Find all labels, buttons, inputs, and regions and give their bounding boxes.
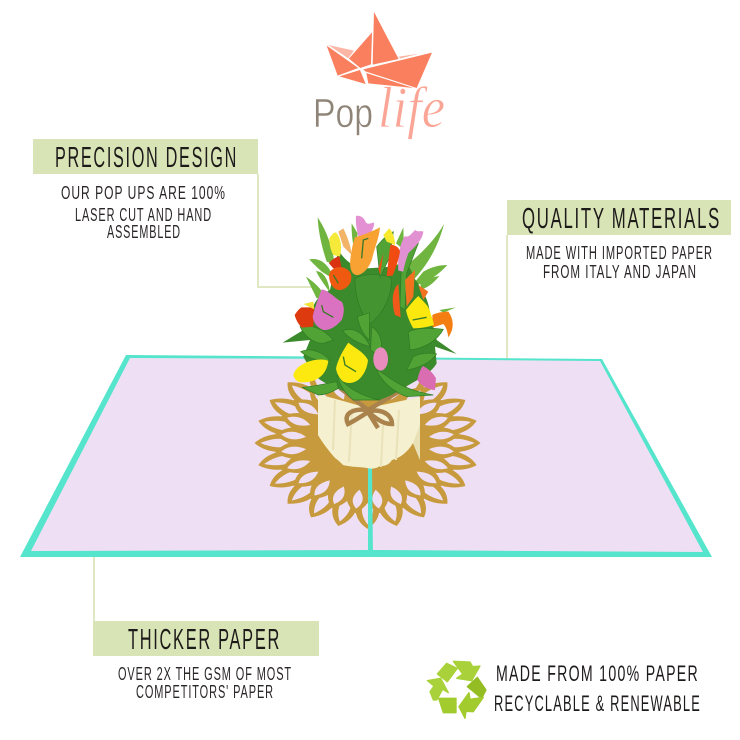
text block: [526, 243, 713, 282]
text block: COMPETITORS' PAPER: [136, 682, 274, 702]
tulip bouquet: [283, 216, 457, 400]
text block: OUR POP UPS ARE 100%: [61, 183, 226, 203]
heading: THICKER PAPER: [128, 624, 281, 656]
mandala paper cut: [198, 322, 511, 581]
icon: recycle arrows: [427, 661, 486, 718]
text block: [118, 664, 292, 702]
vase: [318, 388, 420, 469]
tulip slits: [322, 238, 427, 372]
tulips front: [293, 289, 453, 390]
heading bar: [33, 139, 258, 174]
pop-up card: [20, 216, 712, 581]
text block: [494, 661, 701, 716]
panel: quality materials: [507, 200, 731, 282]
card right page: [372, 359, 703, 552]
icon: origami boat: [327, 12, 432, 88]
recycling note: [427, 661, 701, 718]
heading bar: [507, 200, 731, 235]
text block: LASER CUT AND HAND: [75, 205, 212, 225]
logo word: Pop: Pop: [313, 90, 373, 136]
panel: precision design: [33, 139, 258, 242]
text block: OVER 2X THE GSM OF MOST: [118, 664, 292, 684]
center fold: [368, 467, 373, 557]
heading bar: [93, 621, 319, 656]
card left page: [31, 358, 368, 551]
dark foliage: [283, 250, 457, 400]
ribbon bow: [340, 388, 398, 428]
panel: thicker paper: [93, 621, 319, 702]
text block: ASSEMBLED: [107, 222, 181, 242]
light leaves: [306, 217, 456, 313]
connector lines: [93, 174, 508, 621]
text block: [61, 183, 226, 242]
logo: Poplife paper boat: [313, 12, 445, 140]
tulips back: [329, 216, 428, 317]
mid leaves: [300, 232, 443, 400]
heading: PRECISION DESIGN: [55, 142, 238, 174]
logo word: life: life: [378, 75, 445, 140]
card teal base: [20, 355, 712, 557]
